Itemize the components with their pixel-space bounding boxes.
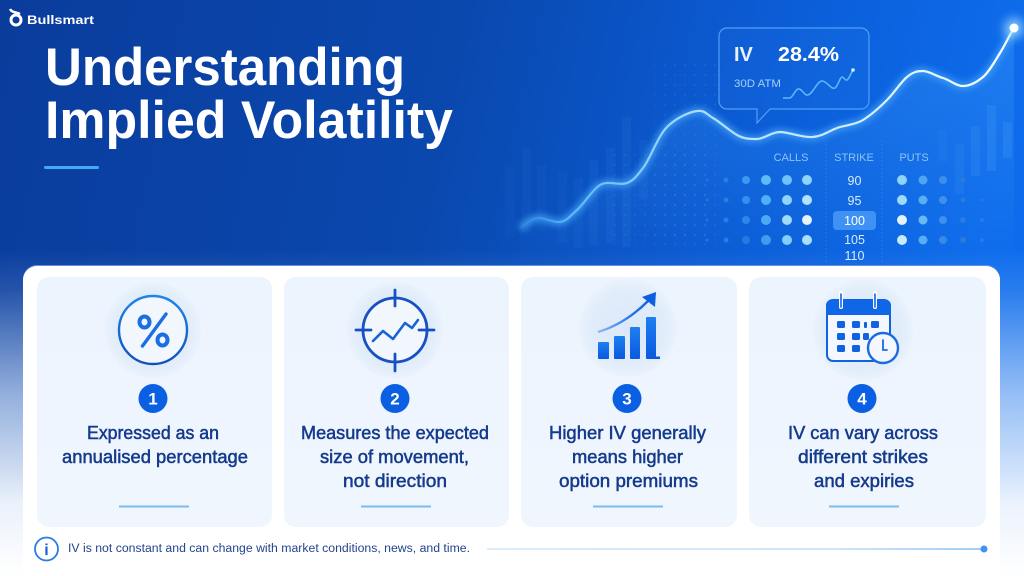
card 4 text: and expiries bbox=[814, 471, 914, 491]
icon: rising bars with arrow bbox=[579, 279, 677, 377]
number badge 1 bbox=[138, 384, 168, 413]
option chain table bbox=[706, 140, 984, 263]
card 3 text bbox=[549, 423, 706, 491]
callout: IV reading: IV bbox=[734, 44, 754, 66]
number badge 2: 2 bbox=[390, 390, 400, 408]
card 2 text: Measures the expected bbox=[301, 423, 489, 443]
number badge 3 bbox=[612, 384, 642, 413]
strike values: 95 bbox=[848, 194, 861, 208]
decorative bar chart behind curve bbox=[505, 105, 1012, 248]
card 1 text: Expressed as an bbox=[87, 423, 219, 443]
card 1 text: annualised percentage bbox=[62, 447, 248, 467]
card 4 text: different strikes bbox=[798, 447, 928, 467]
panel: card 1 bbox=[37, 277, 272, 527]
logo: Bullsmart bbox=[27, 13, 94, 27]
strike values: 100 bbox=[844, 214, 865, 228]
number badge 1: 1 bbox=[148, 390, 158, 408]
card 3 text: means higher bbox=[572, 447, 683, 467]
number badge 3: 3 bbox=[622, 390, 632, 408]
column headers: PUTS bbox=[899, 152, 929, 164]
card 2 text bbox=[301, 423, 489, 491]
strike values bbox=[844, 174, 865, 263]
title: Implied Volatility bbox=[45, 91, 454, 150]
puts dots bbox=[897, 175, 984, 245]
title: Understanding bbox=[45, 38, 405, 97]
strike values: 90 bbox=[848, 174, 861, 188]
card 3 text: option premiums bbox=[559, 471, 698, 491]
sparkline bbox=[783, 68, 855, 98]
number badge 2 bbox=[380, 384, 410, 413]
strike values: 105 bbox=[844, 233, 865, 247]
number badge 4 bbox=[848, 384, 876, 413]
calls dots bbox=[706, 175, 812, 245]
card 3 text: Higher IV generally bbox=[549, 423, 706, 443]
strike values: 110 bbox=[845, 249, 865, 263]
card 1 text bbox=[62, 423, 248, 467]
line chart: implied volatility curve bbox=[520, 18, 1024, 265]
icon: info: i bbox=[44, 542, 49, 559]
panel: card 4 bbox=[749, 277, 986, 527]
footer progress line bbox=[487, 546, 988, 552]
decorative halftone dots bbox=[610, 60, 720, 245]
column headers: CALLS bbox=[774, 152, 808, 164]
panel: white content sheet bbox=[23, 265, 1000, 576]
card 4 text: IV can vary across bbox=[788, 423, 938, 443]
footnote text: IV is not constant and can change with market conditions, news, and time. bbox=[68, 543, 470, 555]
title underline accent bbox=[44, 166, 99, 169]
number badge 4: 4 bbox=[857, 390, 867, 408]
card 4 text bbox=[788, 423, 938, 491]
card 2 text: size of movement, bbox=[320, 447, 469, 467]
card 2 text: not direction bbox=[343, 471, 447, 491]
callout: IV reading: 28.4% bbox=[778, 44, 839, 66]
column headers: STRIKE bbox=[834, 152, 874, 164]
title bbox=[45, 38, 454, 150]
column headers bbox=[774, 152, 929, 164]
panel: card 3 bbox=[521, 277, 737, 527]
icon: calendar with clock bbox=[813, 280, 913, 380]
panel: card 2 bbox=[284, 277, 509, 527]
logo bbox=[10, 9, 94, 27]
callout: IV reading: 30D ATM bbox=[734, 78, 781, 90]
icon: info bbox=[35, 538, 58, 560]
icon: percent bbox=[105, 282, 201, 378]
icon: crosshair with volatility line bbox=[347, 282, 443, 378]
callout: IV reading bbox=[719, 28, 869, 123]
strike 100 highlight bbox=[833, 211, 876, 230]
